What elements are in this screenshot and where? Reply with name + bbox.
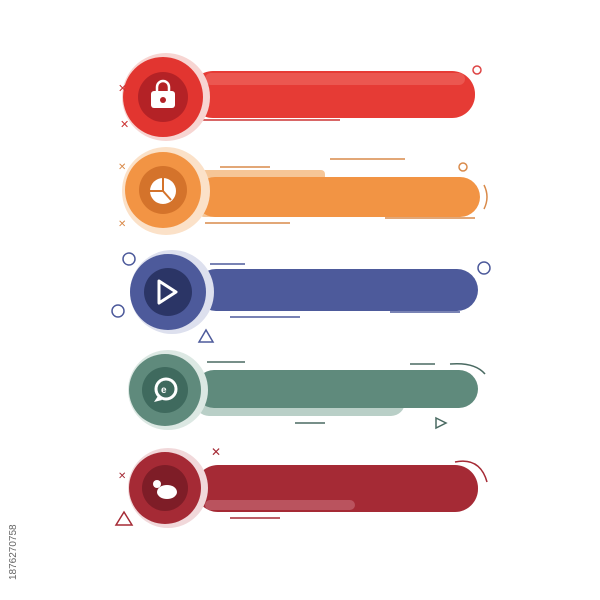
circle icon: chat (128, 350, 208, 430)
row 4: green (128, 350, 485, 430)
bar: blue (195, 269, 478, 311)
watermark id: 1876270758 (8, 524, 19, 580)
row 1: red: ✕ (120, 119, 129, 131)
circle icon: pie (122, 147, 210, 235)
row 1: red: ✕ (118, 83, 127, 95)
bar: red (190, 71, 475, 118)
circle icon: chat: e (161, 385, 167, 396)
bar: dark red (195, 465, 478, 512)
row 1: red (118, 53, 481, 141)
row 2: orange (118, 147, 487, 235)
row 2: orange: ✕ (118, 162, 126, 173)
bar: green (195, 388, 405, 416)
circle icon: piggy (128, 448, 208, 528)
row 5: dark red: ✕ (211, 445, 221, 459)
row 3: blue (112, 250, 490, 342)
row 2: orange: ✕ (118, 219, 126, 230)
row 5: dark red (116, 445, 487, 528)
circle icon: play (130, 250, 214, 334)
circle icon: bag (122, 53, 210, 141)
bar: orange (200, 170, 325, 217)
row 5: dark red: ✕ (118, 471, 126, 482)
